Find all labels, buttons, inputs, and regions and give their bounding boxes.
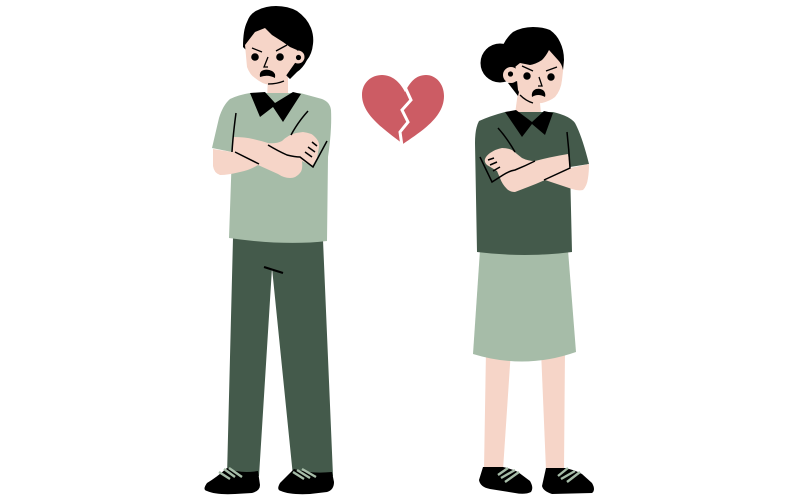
man collar xyxy=(250,92,301,122)
man trousers xyxy=(227,238,333,476)
woman head xyxy=(480,27,564,103)
woman skirt xyxy=(473,250,576,362)
woman right shoe xyxy=(542,468,594,494)
broken heart xyxy=(362,75,444,146)
woman crossed arms xyxy=(480,128,589,192)
man figure xyxy=(204,6,334,494)
man neck xyxy=(267,76,288,100)
woman legs xyxy=(484,350,565,470)
woman figure xyxy=(473,27,594,494)
woman left shoe xyxy=(479,467,532,494)
man shirt xyxy=(212,93,331,243)
man head xyxy=(243,6,313,85)
woman shirt xyxy=(475,112,589,255)
man right shoe xyxy=(278,469,334,494)
woman neck xyxy=(515,92,541,114)
man left shoe xyxy=(204,468,260,494)
man trouser crease xyxy=(264,267,283,273)
man crossed arms xyxy=(213,111,327,178)
woman collar xyxy=(505,110,553,137)
